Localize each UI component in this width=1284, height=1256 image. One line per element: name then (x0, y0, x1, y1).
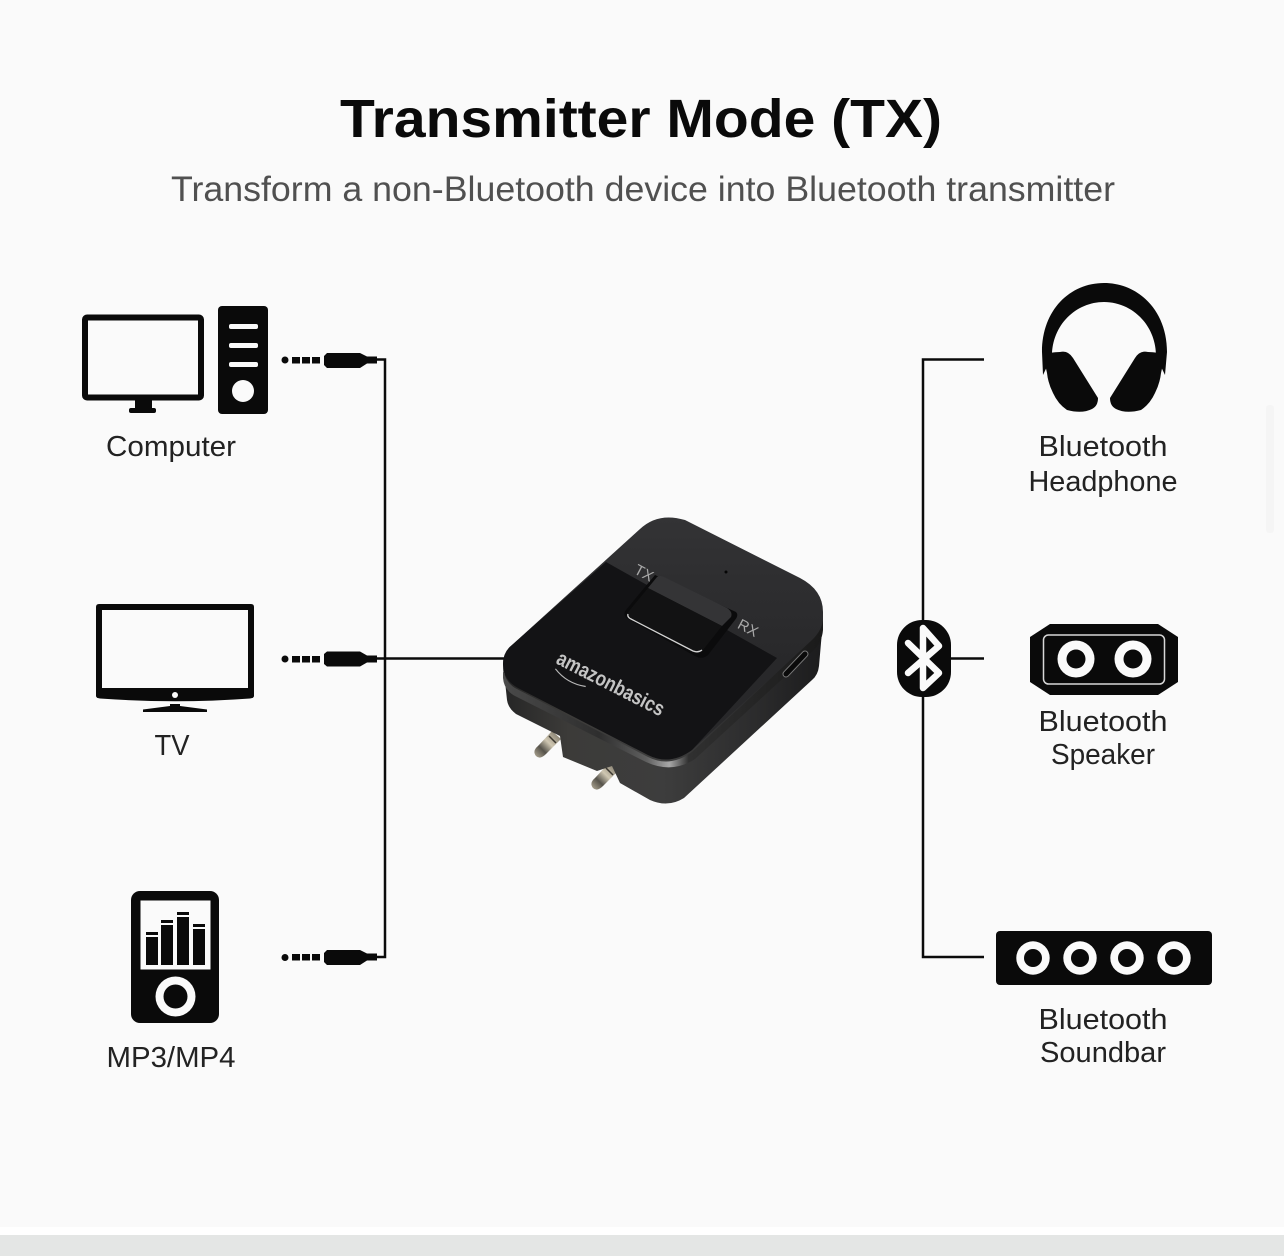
label: bluetooth soundbar (1038, 1004, 1168, 1069)
connection wires: bluetooth outputs (923, 360, 984, 957)
device top face (503, 517, 823, 759)
label: computer: Computer (106, 431, 236, 463)
icon: audio jack computer (282, 353, 377, 368)
label: bluetooth soundbar: Soundbar (1040, 1037, 1166, 1069)
audio plug right (591, 763, 618, 790)
label: bluetooth headphone (1028, 431, 1178, 498)
label: bluetooth speaker: Speaker (1051, 739, 1155, 771)
icon: bluetooth soundbar (996, 931, 1212, 985)
title: Transmitter Mode (TX) (340, 89, 942, 149)
icon: computer (85, 306, 268, 414)
label: mp3/mp4: MP3/MP4 (106, 1042, 236, 1074)
audio plug left (534, 731, 561, 758)
icon: headphones (1042, 283, 1167, 412)
label: rx: RX (735, 616, 761, 641)
label: bluetooth speaker: Bluetooth (1038, 706, 1168, 738)
icon: audio jack tv (282, 652, 377, 666)
mode switch (624, 575, 737, 658)
usb port (786, 654, 805, 674)
brand logo: amazonbasics (553, 647, 668, 721)
label: bluetooth headphone: Bluetooth (1038, 431, 1168, 463)
label: bluetooth headphone: Headphone (1028, 466, 1178, 498)
icon: bluetooth badge (897, 620, 951, 697)
device body (504, 620, 823, 804)
device dark lower face (503, 562, 777, 759)
icon: audio jack mp3 (282, 950, 377, 965)
device: bluetooth adapter (503, 517, 823, 804)
label: bluetooth soundbar: Bluetooth (1038, 1004, 1168, 1036)
connection wires: audio sources (376, 360, 504, 957)
label: tx: TX (631, 561, 656, 585)
icon: tv (96, 604, 254, 712)
label: bluetooth speaker (1038, 706, 1168, 771)
device bezel (503, 618, 823, 767)
indicator dot (724, 570, 728, 574)
label: tv: TV (154, 730, 190, 762)
icon: bluetooth speaker (1030, 624, 1178, 695)
subtitle: Transform a non-Bluetooth device into Bluetooth transmitter (171, 170, 1115, 209)
icon: mp3 player (131, 891, 219, 1023)
